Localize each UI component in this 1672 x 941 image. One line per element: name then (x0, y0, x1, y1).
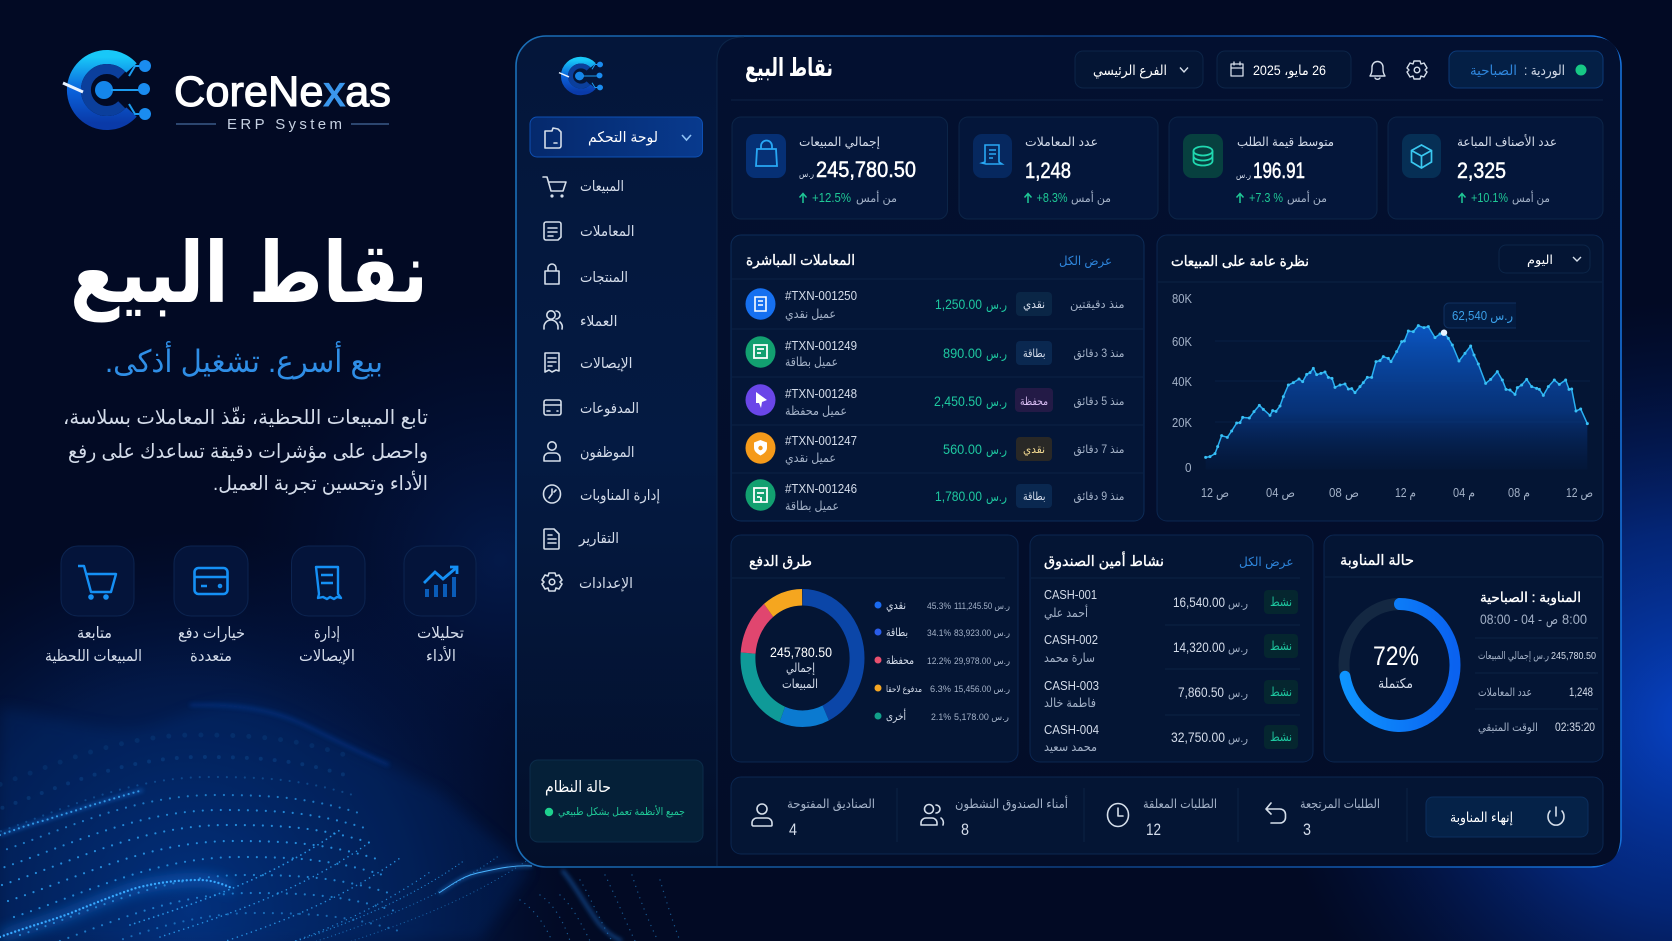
cashier row 001: أحمد علي (1044, 604, 1088, 620)
transaction row 1248: 2,450.50 (934, 394, 982, 409)
y axis labels: 0 (1185, 461, 1192, 475)
cashier row 001 (1044, 588, 1298, 620)
transaction row 1249: #TXN-001249 (785, 339, 857, 353)
y axis labels: 60K (1172, 335, 1193, 349)
KPI card: average order value: ر.س (1236, 170, 1251, 180)
button: end shift: إنهاء المناوبة (1450, 810, 1513, 826)
intro paragraph: تابع المبيعات اللحظية، نفّذ المعاملات بسلاسة، (63, 406, 428, 429)
menu item: reports: التقارير (578, 531, 619, 547)
shift details: 8:00 (1562, 612, 1587, 627)
transaction row 1247: عميل نقدي (785, 451, 836, 465)
icon: cart (78, 566, 116, 592)
panel: live transactions (731, 235, 1144, 521)
donut chart: المبيعات (782, 677, 818, 691)
transaction row 1249: بطاقة (1023, 348, 1046, 360)
transaction row 1250: #TXN-001250 (785, 289, 857, 303)
line chart (1172, 292, 1593, 501)
KPI card: average order value: +7.3 % (1249, 191, 1283, 205)
transaction row 1248 (746, 384, 1124, 418)
stat: active cashiers (921, 795, 1068, 839)
menu item: employees: الموظفون (580, 445, 634, 461)
icon: document (973, 134, 1012, 178)
branch selector (1075, 51, 1203, 88)
system status card: جميع الأنظمة تعمل بشكل طبيعي (558, 805, 685, 818)
stat: active cashiers: 8 (961, 820, 969, 839)
subtitle: بيع أسرع. تشغيل أذكى. (105, 341, 383, 380)
donut chart: 245,780.50 (770, 645, 832, 660)
y axis labels: 40K (1172, 375, 1193, 389)
KPI card: transaction count (959, 117, 1158, 219)
feature: real-time sales tracking: متابعة (77, 625, 112, 642)
title: نقاط البيع (70, 226, 428, 323)
KPI card: items sold (1388, 117, 1603, 219)
sidebar active item: dashboard (530, 117, 702, 157)
stat: pending orders: 12 (1146, 820, 1161, 839)
menu item: transactions (544, 222, 634, 240)
dotted particle wave (0, 703, 680, 941)
current shift pill: الصباحية (1470, 63, 1517, 78)
payment legend: 34.1% (927, 628, 951, 638)
KPI card: items sold: عدد الأصناف المباعة (1457, 134, 1557, 149)
payment legend (874, 600, 1010, 724)
shift details: ص (1546, 612, 1558, 628)
branch selector: الفرع الرئيسي (1093, 63, 1167, 79)
transaction row 1247: 560.00 (943, 442, 982, 457)
y axis labels (1172, 292, 1193, 475)
donut chart: إجمالي (786, 661, 815, 675)
KPI card: total sales: ر.س (799, 169, 814, 179)
cashier row 002: CASH-002 (1044, 633, 1098, 647)
link: view all: عرض الكل (1239, 555, 1294, 570)
stat: open cash registers: الصناديق المفتوحة (787, 797, 875, 812)
KPI card: total sales (732, 117, 948, 219)
shift details: الوقت المتبقي (1478, 722, 1538, 735)
payment legend: مدفوع لاحقا (886, 684, 922, 694)
cashier row 003: 7,860.50 (1178, 685, 1224, 700)
KPI card: average order value: 196.91 (1253, 158, 1305, 183)
KPI card: items sold: +10.1% (1471, 191, 1508, 205)
brand logo (63, 57, 391, 133)
KPI card: transaction count: من أمس (1071, 190, 1111, 206)
shift details (1475, 590, 1598, 735)
cashier row 003: CASH-003 (1044, 679, 1099, 693)
cashier row 001: ر.س (1228, 598, 1248, 611)
intro paragraph: الأداء وتحسين تجربة العميل. (213, 471, 428, 495)
x axis labels: 08 م (1508, 486, 1530, 500)
cashier row 004: محمد سعيد (1044, 740, 1097, 754)
transaction row 1250: نقدي (1023, 299, 1045, 311)
x axis labels: 04 م (1453, 486, 1475, 500)
button: end shift (1426, 797, 1588, 837)
bottom stats bar (731, 777, 1603, 854)
cashier row 003: فاطمة خالد (1044, 696, 1096, 710)
transaction row 1249 (746, 336, 1124, 369)
transaction row 1247 (746, 432, 1124, 465)
transaction row 1248: #TXN-001248 (785, 387, 857, 401)
cashier row 002: ر.س (1228, 643, 1248, 656)
cashier row 004: 32,750.00 (1171, 730, 1225, 745)
transaction row 1250: منذ دقيقتين (1070, 299, 1124, 312)
icon: growth chart (424, 567, 457, 597)
transaction row 1250: عميل نقدي (785, 307, 836, 321)
transaction row 1247: #TXN-001247 (785, 434, 857, 448)
payment legend: 15,456.00 ر.س (954, 684, 1010, 694)
menu item: payments: المدفوعات (580, 401, 639, 417)
system status card: حالة النظام (545, 779, 611, 796)
x axis labels: 12 م (1395, 486, 1416, 500)
panel: cashier activity (1030, 535, 1313, 762)
payment legend: 12.2% (927, 656, 951, 666)
menu item: receipts (545, 353, 632, 372)
cashier row 002: سارة محمد (1044, 651, 1095, 666)
header (745, 51, 1603, 88)
transaction row 1247: ر.س (986, 443, 1007, 458)
transaction row 1248: عميل محفظة (785, 404, 847, 418)
menu item: settings (542, 573, 633, 592)
KPI card: transaction count: +8.3% (1036, 191, 1068, 205)
stat: pending orders: الطلبات المعلقة (1143, 797, 1217, 811)
feature: receipt management: إدارة (314, 625, 340, 642)
x axis labels (1201, 486, 1593, 501)
KPI card: average order value: من أمس (1287, 190, 1327, 206)
payment legend: أخرى (886, 708, 906, 724)
payment legend: 5,178.00 ر.س (954, 712, 1009, 722)
feature: real-time sales tracking: المبيعات اللحظية (45, 648, 142, 665)
menu item: settings: الإعدادات (579, 576, 633, 592)
menu item: reports (544, 529, 619, 549)
transaction row 1246 (746, 479, 1124, 513)
panel: shift status (1324, 535, 1603, 762)
menu item: sales (543, 177, 624, 198)
stat: returned orders: الطلبات المرتجعة (1300, 797, 1380, 812)
page heading: نقاط البيع (745, 54, 833, 83)
KPI card: total sales: +12.5% (812, 191, 851, 205)
stat: returned orders (1266, 797, 1380, 839)
cashier row 002: نشط (1270, 639, 1292, 653)
menu item: products (545, 264, 628, 286)
feature: receipt management: الإيصالات (299, 648, 355, 665)
shift details: 245,780.50 (1551, 650, 1596, 662)
menu item: products: المنتجات (580, 270, 628, 286)
stat: open cash registers: 4 (789, 820, 797, 839)
transaction row 1249: عميل بطاقة (785, 355, 838, 369)
icon: receipt (316, 567, 341, 599)
transactions heading: المعاملات المباشرة (746, 253, 855, 269)
payment legend: 29,978.00 ر.س (954, 656, 1010, 666)
period selector: اليوم (1527, 253, 1553, 268)
link: view all: عرض الكل (1059, 254, 1112, 269)
sales overview heading: نظرة عامة على المبيعات (1171, 254, 1309, 270)
menu item: payments (544, 400, 639, 417)
stat: open cash registers (752, 797, 875, 839)
transaction row 1246: ر.س (986, 490, 1007, 505)
cashier row 002 (1044, 633, 1298, 666)
cashier row 001: نشط (1270, 595, 1292, 609)
transaction row 1249: ر.س (986, 347, 1007, 362)
feature: performance analytics (404, 546, 476, 665)
logo wordmark: CoreNexas (174, 68, 391, 116)
feature: performance analytics: تحليلات (417, 625, 464, 642)
feature: multiple payment options: خيارات دفع (178, 625, 245, 643)
cashier activity heading: نشاط أمين الصندوق (1044, 551, 1164, 570)
payment legend: 111,245.50 ر.س (954, 601, 1010, 611)
transaction row 1246: منذ 9 دقائق (1074, 491, 1124, 504)
feature: multiple payment options: متعددة (190, 648, 232, 665)
shift details: 1,248 (1569, 687, 1593, 699)
KPI card: average order value (1169, 117, 1377, 219)
chart tooltip (1444, 303, 1516, 328)
payment legend: 83,923.00 ر.س (954, 628, 1010, 638)
menu item: shift management (544, 485, 660, 504)
transaction row 1248: ر.س (986, 395, 1007, 410)
transaction row 1248: منذ 5 دقائق (1074, 396, 1124, 409)
panel: sidebar (530, 60, 703, 842)
KPI card: total sales: إجمالي المبيعات (799, 135, 880, 149)
x axis labels: 12 ص (1201, 486, 1229, 501)
current shift pill (1449, 51, 1603, 88)
intro paragraph: واحصل على مؤشرات دقيقة تساعدك على رفع (68, 441, 428, 463)
feature: real-time sales tracking (45, 546, 142, 665)
KPI card: total sales: 245,780.50 (816, 157, 916, 182)
KPI card: items sold: من أمس (1512, 190, 1550, 206)
intro paragraph (63, 406, 428, 495)
chart tooltip: 62,540 ر.س (1452, 309, 1513, 324)
cashier row 004: ر.س (1228, 733, 1248, 746)
y axis labels: 20K (1172, 416, 1193, 430)
stat: returned orders: 3 (1303, 820, 1311, 839)
shift details: 02:35:20 (1555, 722, 1595, 734)
feature: performance analytics: الأداء (426, 646, 456, 665)
payment methods heading: طرق الدفع (749, 554, 812, 570)
transaction row 1248: محفظة (1020, 396, 1048, 408)
KPI card: average order value: متوسط قيمة الطلب (1237, 135, 1334, 150)
x axis labels: 12 ص (1566, 486, 1593, 501)
KPI card: transaction count: عدد المعاملات (1025, 135, 1098, 149)
cashier row 004: CASH-004 (1044, 723, 1099, 737)
current shift pill: الوردية : (1524, 63, 1565, 79)
payment legend: 45.3% (927, 601, 951, 611)
transaction row 1246: #TXN-001246 (785, 482, 857, 496)
cashier row 003: نشط (1270, 685, 1292, 699)
menu item: employees (544, 442, 634, 461)
icon: coin stack (1183, 134, 1223, 178)
period selector (1499, 245, 1590, 273)
transaction row 1247: نقدي (1023, 444, 1045, 456)
menu item: shift management: إدارة المناوبات (580, 488, 660, 504)
progress gauge: مكتملة (1378, 676, 1413, 691)
transaction row 1250: ر.س (986, 298, 1007, 313)
donut chart (748, 597, 857, 719)
cashier row 001: 16,540.00 (1173, 595, 1225, 610)
payment legend: بطاقة (886, 627, 908, 639)
cashier row 001: CASH-001 (1044, 588, 1097, 602)
date selector (1217, 51, 1351, 88)
x axis labels: 08 ص (1329, 486, 1359, 501)
KPI card: total sales: من أمس (856, 190, 897, 206)
payment legend: 2.1% (931, 712, 951, 722)
sidebar active item: dashboard: لوحة التحكم (588, 130, 658, 146)
payment legend: محفظة (886, 655, 914, 667)
cashier row 004: نشط (1270, 730, 1292, 744)
payment legend: نقدي (886, 600, 906, 612)
shift details: عدد المعاملات (1478, 687, 1532, 699)
cashier row 003 (1044, 679, 1298, 710)
icon: CoreNexas logo mark (63, 57, 151, 123)
transaction row 1246: بطاقة (1023, 491, 1046, 503)
icon: box (1402, 134, 1441, 178)
transaction row 1249: منذ 3 دقائق (1074, 348, 1124, 361)
menu item: customers (544, 311, 618, 330)
transaction row 1250: 1,250.00 (935, 297, 982, 312)
menu item: receipts: الإيصالات (580, 356, 632, 372)
shift details: 08:00 - 04 - (1480, 612, 1542, 627)
cashier row 003: ر.س (1228, 688, 1248, 701)
panel: sales overview (1157, 235, 1603, 521)
icon: card (194, 568, 228, 594)
logo tagline: ERP System (227, 116, 342, 133)
transaction row 1246: 1,780.00 (935, 489, 982, 504)
progress gauge (1344, 604, 1455, 726)
feature: receipt management (292, 546, 365, 665)
stat: active cashiers: أمناء الصندوق النشطون (955, 795, 1068, 812)
panel: payment methods (731, 535, 1018, 762)
KPI card: items sold: 2,325 (1457, 158, 1506, 183)
feature: multiple payment options (174, 546, 248, 665)
cashier row 004 (1044, 723, 1298, 754)
stat: pending orders (1108, 797, 1217, 839)
icon: notification bell (1370, 62, 1385, 79)
dashboard window (516, 36, 1621, 867)
menu item: customers: العملاء (580, 314, 618, 330)
KPI card: transaction count: 1,248 (1025, 158, 1071, 183)
shift status heading: حالة المناوبة (1340, 553, 1414, 569)
transaction row 1246: عميل بطاقة (785, 499, 839, 513)
payment legend: 6.3% (930, 684, 951, 694)
transaction row 1249: 890.00 (943, 346, 982, 361)
transaction row 1250 (746, 288, 1124, 321)
system status card (530, 760, 703, 842)
menu item: transactions: المعاملات (580, 224, 634, 240)
icon: sidebar logo (559, 60, 603, 92)
y axis labels: 80K (1172, 292, 1193, 306)
x axis labels: 04 ص (1266, 486, 1295, 501)
cashier row 002: 14,320.00 (1173, 640, 1225, 655)
icon: settings gear (1407, 61, 1427, 79)
menu item: sales: المبيعات (580, 179, 624, 195)
icon: shopping bag (746, 134, 786, 178)
progress gauge: 72% (1373, 641, 1419, 671)
transaction row 1247: منذ 7 دقائق (1074, 444, 1124, 457)
date selector: 26 مايو، 2025 (1253, 63, 1326, 79)
shift details: المناوبة : الصباحية (1480, 590, 1581, 606)
shift details: ر.س إجمالي المبيعات (1478, 650, 1549, 662)
